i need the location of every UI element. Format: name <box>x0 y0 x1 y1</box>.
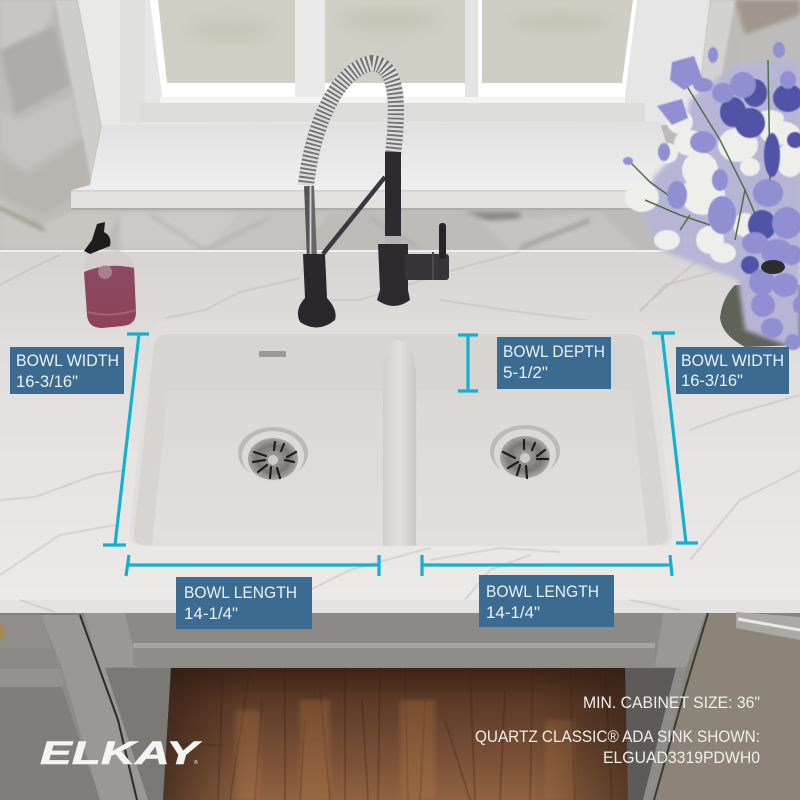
sink: undermount double bowl <box>130 320 672 546</box>
label: right bowl length: 14-1/4" <box>486 604 540 622</box>
label: bowl depth: 5-1/2" <box>503 364 548 382</box>
logo: Elkay: ELKAY <box>40 735 202 771</box>
label: right bowl width <box>676 347 789 394</box>
window: casing and trim <box>55 0 735 183</box>
dimension line: left bowl width <box>103 334 149 545</box>
marble veins <box>0 250 800 612</box>
product information text: MIN. CABINET SIZE: 36" <box>583 693 760 712</box>
handle <box>405 254 449 280</box>
product information text: ELGUAD3319PDWH0 <box>603 748 760 767</box>
right cabinet side <box>654 612 800 800</box>
badge <box>259 351 286 357</box>
stems <box>628 60 770 250</box>
dimension line: left bowl length <box>126 555 380 576</box>
appliance handle <box>736 612 800 640</box>
label: right bowl width: BOWL WIDTH <box>681 352 784 370</box>
label: bowl depth <box>497 337 611 389</box>
deep blue-violet petals <box>720 79 800 274</box>
left cabinet door <box>0 615 148 800</box>
left bowl <box>152 351 384 545</box>
background wall: marble herringbone tile <box>0 0 800 255</box>
flower bouquet <box>623 42 800 350</box>
logo: Elkay: ® <box>194 759 198 766</box>
label: right bowl width: 16-3/16" <box>681 372 743 390</box>
label: left bowl length <box>176 577 312 629</box>
foliage backing <box>640 60 800 350</box>
window sill <box>71 122 680 210</box>
left drain <box>238 427 308 481</box>
label: right bowl length: BOWL LENGTH <box>486 583 599 601</box>
right drain <box>490 425 560 479</box>
product information text: QUARTZ CLASSIC® ADA SINK SHOWN: <box>475 727 760 746</box>
product information text <box>475 693 760 767</box>
faucet <box>298 63 449 328</box>
dimension line: bowl depth <box>458 335 478 391</box>
brass knob <box>0 622 5 641</box>
glass vase <box>720 285 800 347</box>
label: left bowl width <box>10 347 124 394</box>
label: left bowl width: BOWL WIDTH <box>16 352 119 370</box>
window panes with garden view <box>150 0 637 103</box>
label: left bowl length: BOWL LENGTH <box>184 584 297 602</box>
bowl divider <box>383 340 416 546</box>
apron rail <box>84 613 706 667</box>
faucet hose spout <box>306 63 396 185</box>
logo: Elkay <box>40 735 202 771</box>
dimension line: right bowl width <box>652 333 698 543</box>
white petals <box>625 110 800 263</box>
faucet base <box>377 244 410 306</box>
label: left bowl length: 14-1/4" <box>184 605 238 623</box>
sink rim <box>130 320 672 546</box>
right bowl <box>416 390 648 545</box>
label: bowl depth: BOWL DEPTH <box>503 343 605 361</box>
flower centre <box>761 260 785 274</box>
dimension line: right bowl length <box>422 555 672 576</box>
wood floor <box>163 668 628 800</box>
flexible chrome stem <box>309 186 312 258</box>
main column <box>385 152 401 237</box>
lavender petals <box>623 42 800 350</box>
label: left bowl width: 16-3/16" <box>16 373 78 391</box>
label: right bowl length <box>479 575 614 627</box>
cabinet base <box>0 612 800 800</box>
soap bottle <box>84 222 136 328</box>
under-sink opening <box>105 668 676 800</box>
faucet arm <box>323 177 385 254</box>
spray holder <box>298 254 336 328</box>
countertop <box>0 250 800 615</box>
